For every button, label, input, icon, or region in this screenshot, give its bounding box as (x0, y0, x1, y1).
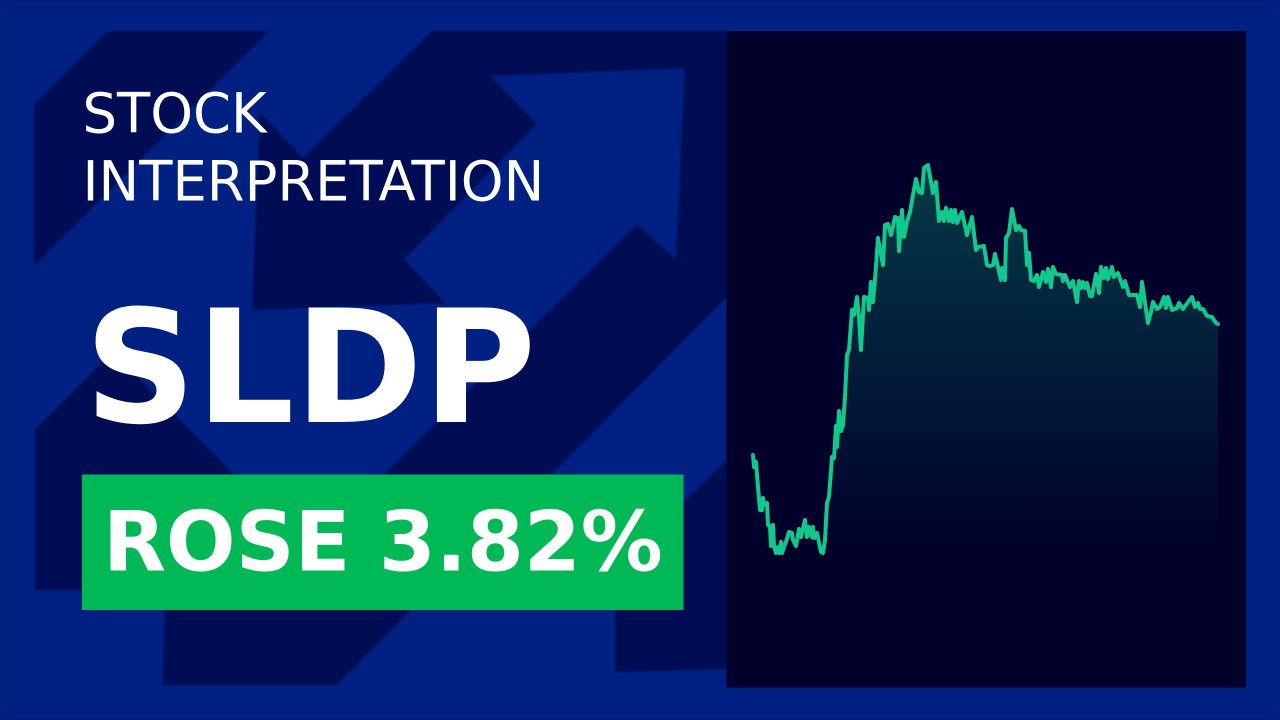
change badge (82, 474, 684, 610)
sample point markers (752, 220, 1219, 548)
change badge: ROSE 3.82% (103, 494, 663, 591)
heading: STOCK (82, 81, 269, 146)
price line (753, 165, 1218, 553)
area fill (753, 165, 1218, 553)
background arrows (34, 31, 727, 685)
heading: INTERPRETATION (82, 149, 544, 214)
ticker symbol: SLDP (84, 276, 536, 459)
heading (82, 81, 544, 214)
chart panel (726, 31, 1246, 688)
